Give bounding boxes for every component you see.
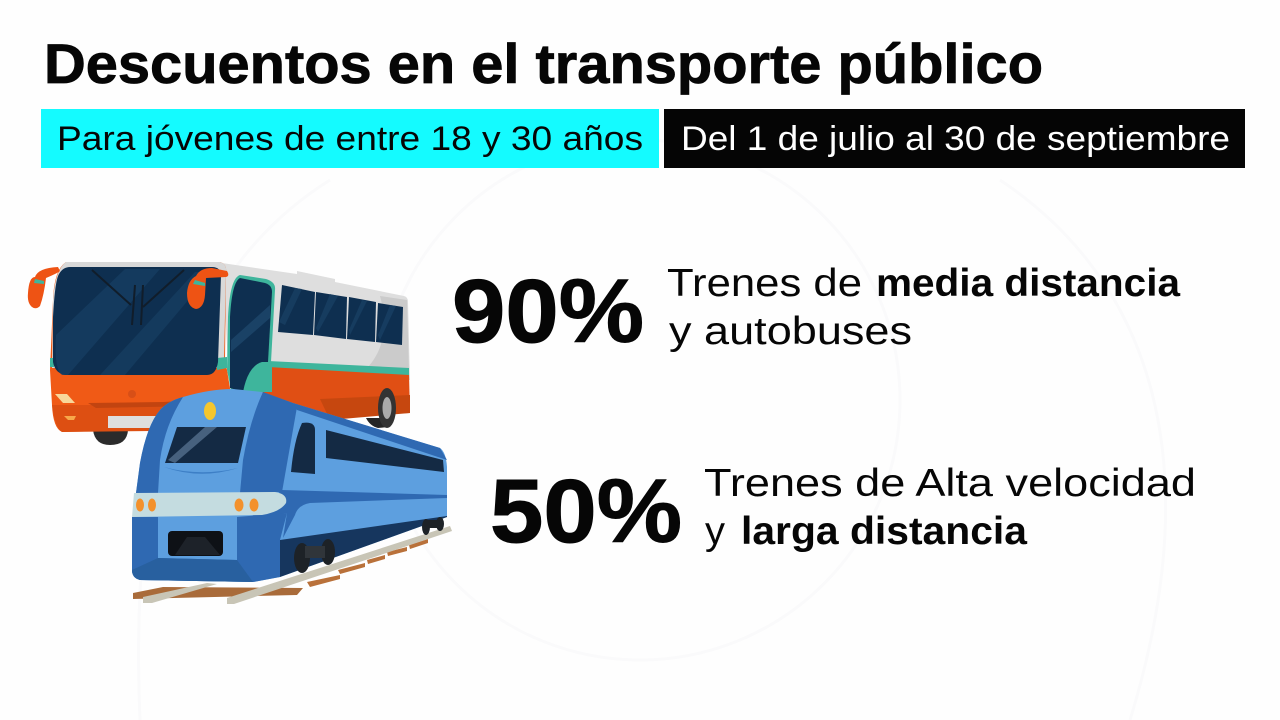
train wheels [294,517,444,573]
rail track [133,526,452,604]
bus wipers [92,270,184,325]
bus side [222,263,410,395]
title: Descuentos en el transporte público [44,32,1043,95]
age banner [41,109,659,168]
icon: bus [28,262,410,445]
description: media distancia [667,262,1180,353]
train body [132,389,447,582]
bus front body [50,262,230,432]
bus mirrors [28,267,228,309]
date banner [664,109,1245,168]
train headlight [204,402,216,420]
description: larga distancia: Trenes de Alta velocidad [704,462,1196,505]
date banner: Del 1 de julio al 30 de septiembre [681,120,1230,158]
bus windshield [53,267,221,375]
discount: 90% [452,262,1180,362]
percentage value 50%: 50% [490,462,682,562]
discount: 50% [490,462,1196,562]
bus front wheel [93,430,128,445]
description: media distancia: media distancia [876,262,1180,305]
age banner: Para jóvenes de entre 18 y 30 años [57,120,643,158]
train blue panels [132,392,447,582]
train grille [168,531,223,556]
description: media distancia: Trenes de [667,262,862,305]
description: larga distancia [704,462,1196,553]
train bogie skirt [280,516,447,577]
train front band [132,492,286,517]
train windows [165,423,444,474]
bus stripe [253,361,409,375]
percentage value 90%: 90% [452,262,644,362]
bus rear wheel [366,388,396,428]
bus door [227,275,275,395]
description: larga distancia: larga distancia [741,510,1027,553]
icon: train [132,389,452,604]
description: larga distancia: y [705,510,726,553]
bus grille and lights [55,390,158,428]
bus windows [278,285,403,345]
description: media distancia: y autobuses [669,310,912,353]
